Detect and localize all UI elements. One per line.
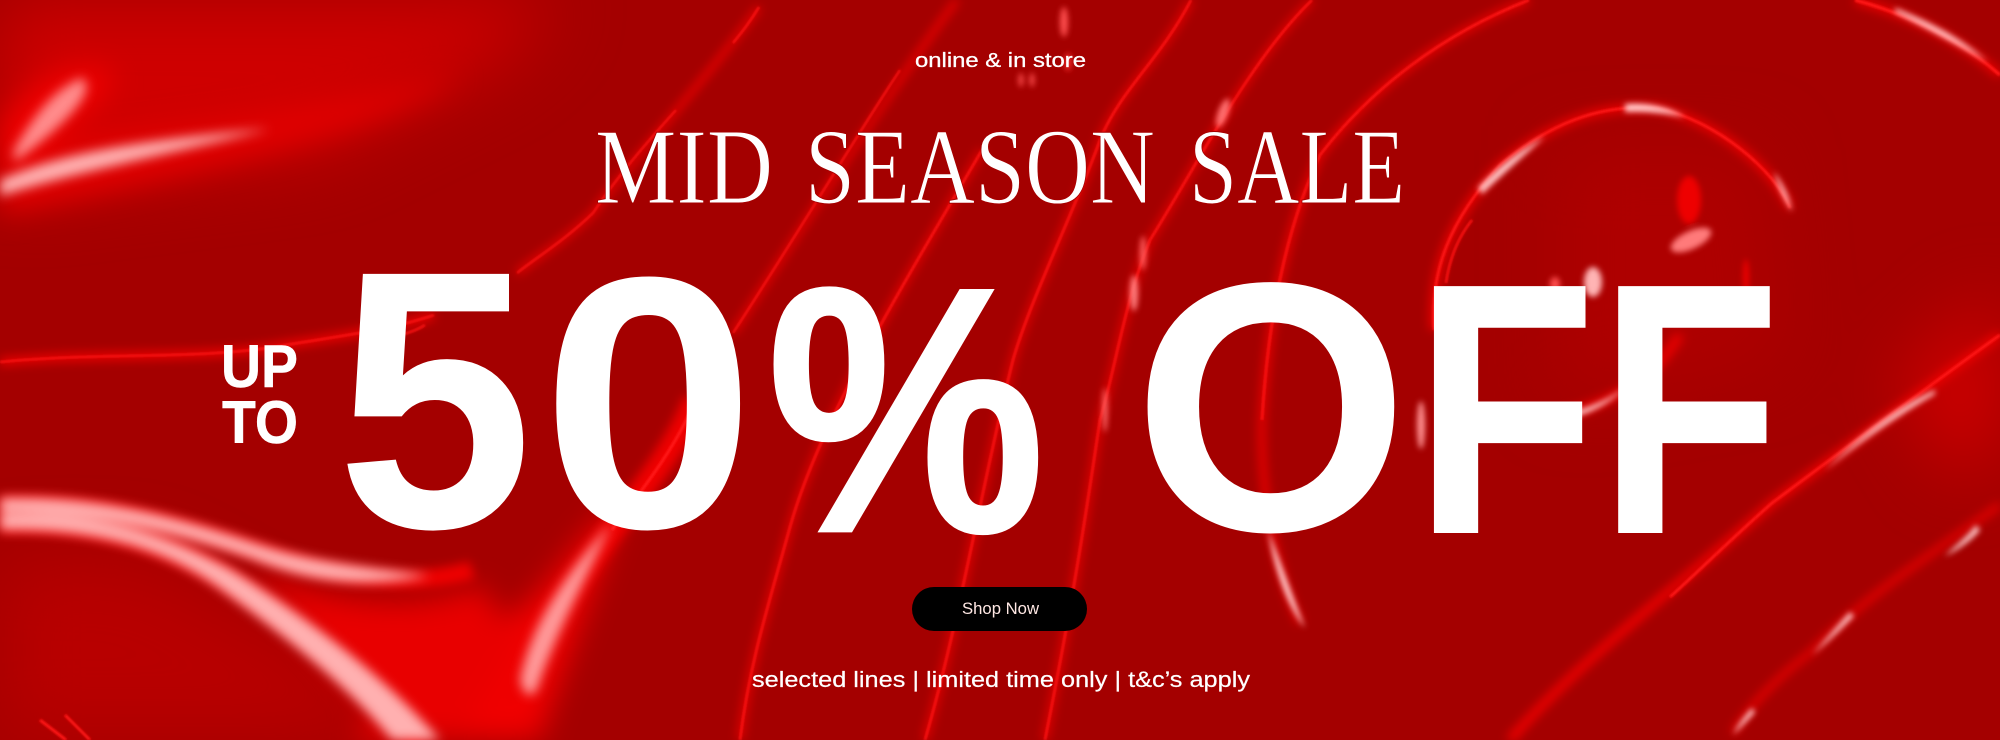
button: shop now: Shop Now xyxy=(962,599,1040,618)
figure: 0: 0 xyxy=(541,203,756,604)
label: up to: TO xyxy=(222,389,298,456)
button: shop now xyxy=(912,587,1087,631)
hot white highlights xyxy=(1268,8,1988,735)
heading: mid season sale: MID xyxy=(595,108,773,227)
headline: 50% off xyxy=(336,194,1780,608)
label: up to: UP xyxy=(221,333,298,400)
heading: mid season sale xyxy=(595,108,1405,227)
figure: percent sign: % xyxy=(767,216,1045,606)
footer note: terms: selected lines | limited time only | t&c’s apply xyxy=(752,667,1250,692)
heading: mid season sale: SALE xyxy=(1189,108,1405,227)
heading: mid season sale: SEASON xyxy=(805,108,1155,227)
word: O: O xyxy=(1133,210,1409,606)
light blobs xyxy=(1019,7,1749,449)
tagline: online & in store: online & in store xyxy=(915,50,1086,72)
label: up to xyxy=(221,333,298,456)
word: FF: FF xyxy=(1415,211,1780,608)
figure: 5: 5 xyxy=(336,194,533,606)
soft pale highlights on the large bands xyxy=(0,78,612,740)
